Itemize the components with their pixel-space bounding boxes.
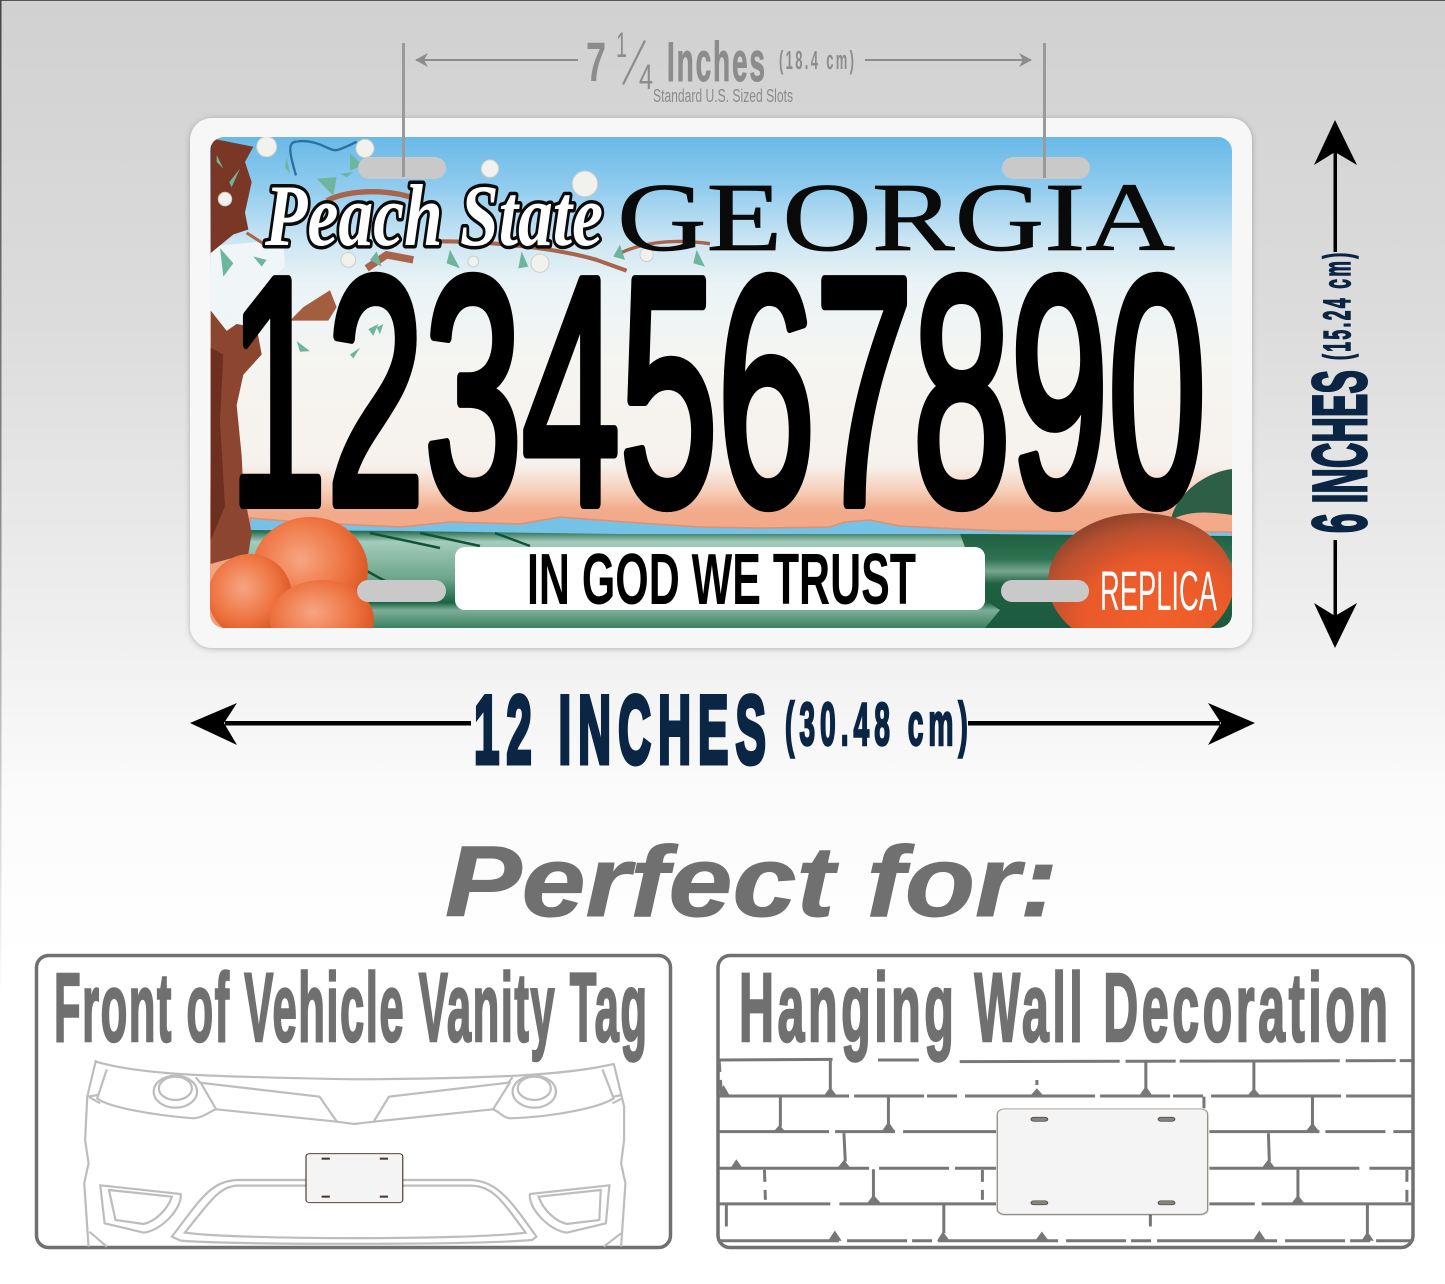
tree trunk, branches and blossom canopy: [211, 137, 710, 564]
height label: (15.24 cm): [1317, 253, 1359, 360]
panel heading: Front of Vehicle Vanity Tag: [54, 953, 647, 1062]
panel frame: [718, 956, 1413, 1248]
height label: 6 INCHES: [1297, 370, 1383, 533]
slot note: Standard U.S. Sized Slots: [653, 86, 793, 106]
width arrow: [190, 703, 1255, 745]
slot width label: [586, 26, 854, 97]
height dimension: [1297, 120, 1383, 648]
height label: [1297, 253, 1383, 533]
mini plate: [306, 1154, 403, 1203]
panel: front of vehicle: [36, 953, 670, 1248]
leaves: [217, 153, 705, 359]
heading: Perfect for: Perfect for:: [445, 826, 1058, 938]
license plate: REPLICA: [1100, 559, 1217, 622]
slot width label: 4: [639, 58, 653, 97]
mini plate: [997, 1109, 1208, 1214]
car front outline: [84, 1060, 625, 1247]
motto strip: [455, 540, 985, 620]
height arrow: [1314, 120, 1357, 648]
slot width label: (18.4 cm): [779, 46, 854, 75]
license plate: [190, 118, 1252, 660]
distant river and hills: [249, 516, 1232, 536]
green fields: [230, 530, 1000, 628]
mounting slots: [357, 157, 1090, 602]
width label: [474, 676, 968, 785]
width label: (30.48 cm): [785, 691, 968, 758]
plate body: [190, 118, 1252, 648]
panel heading: Hanging Wall Decoration: [739, 955, 1388, 1063]
width dimension: [190, 676, 1255, 785]
slot width dimension: [402, 26, 1046, 178]
slot width arrows: [415, 53, 1032, 67]
slot width label: 7: [586, 30, 606, 93]
motto strip: IN GOD WE TRUST: [527, 540, 916, 620]
slot width label: Inches: [667, 32, 765, 94]
slot guide lines: [402, 43, 1046, 178]
panel: hanging wall decoration: [718, 955, 1413, 1248]
panel frame: [36, 956, 670, 1248]
width label: 12 INCHES: [474, 676, 766, 785]
brick wall: [718, 1059, 1411, 1241]
state name GEORGIA: GEORGIA: [617, 164, 1175, 272]
peaches left: [210, 517, 374, 628]
slot width label: 1: [616, 26, 627, 65]
peach right and leaf: [1048, 469, 1232, 628]
plate artwork: [208, 137, 1234, 660]
blossoms: [218, 137, 653, 272]
Peach State script: Peach State: [264, 168, 603, 265]
